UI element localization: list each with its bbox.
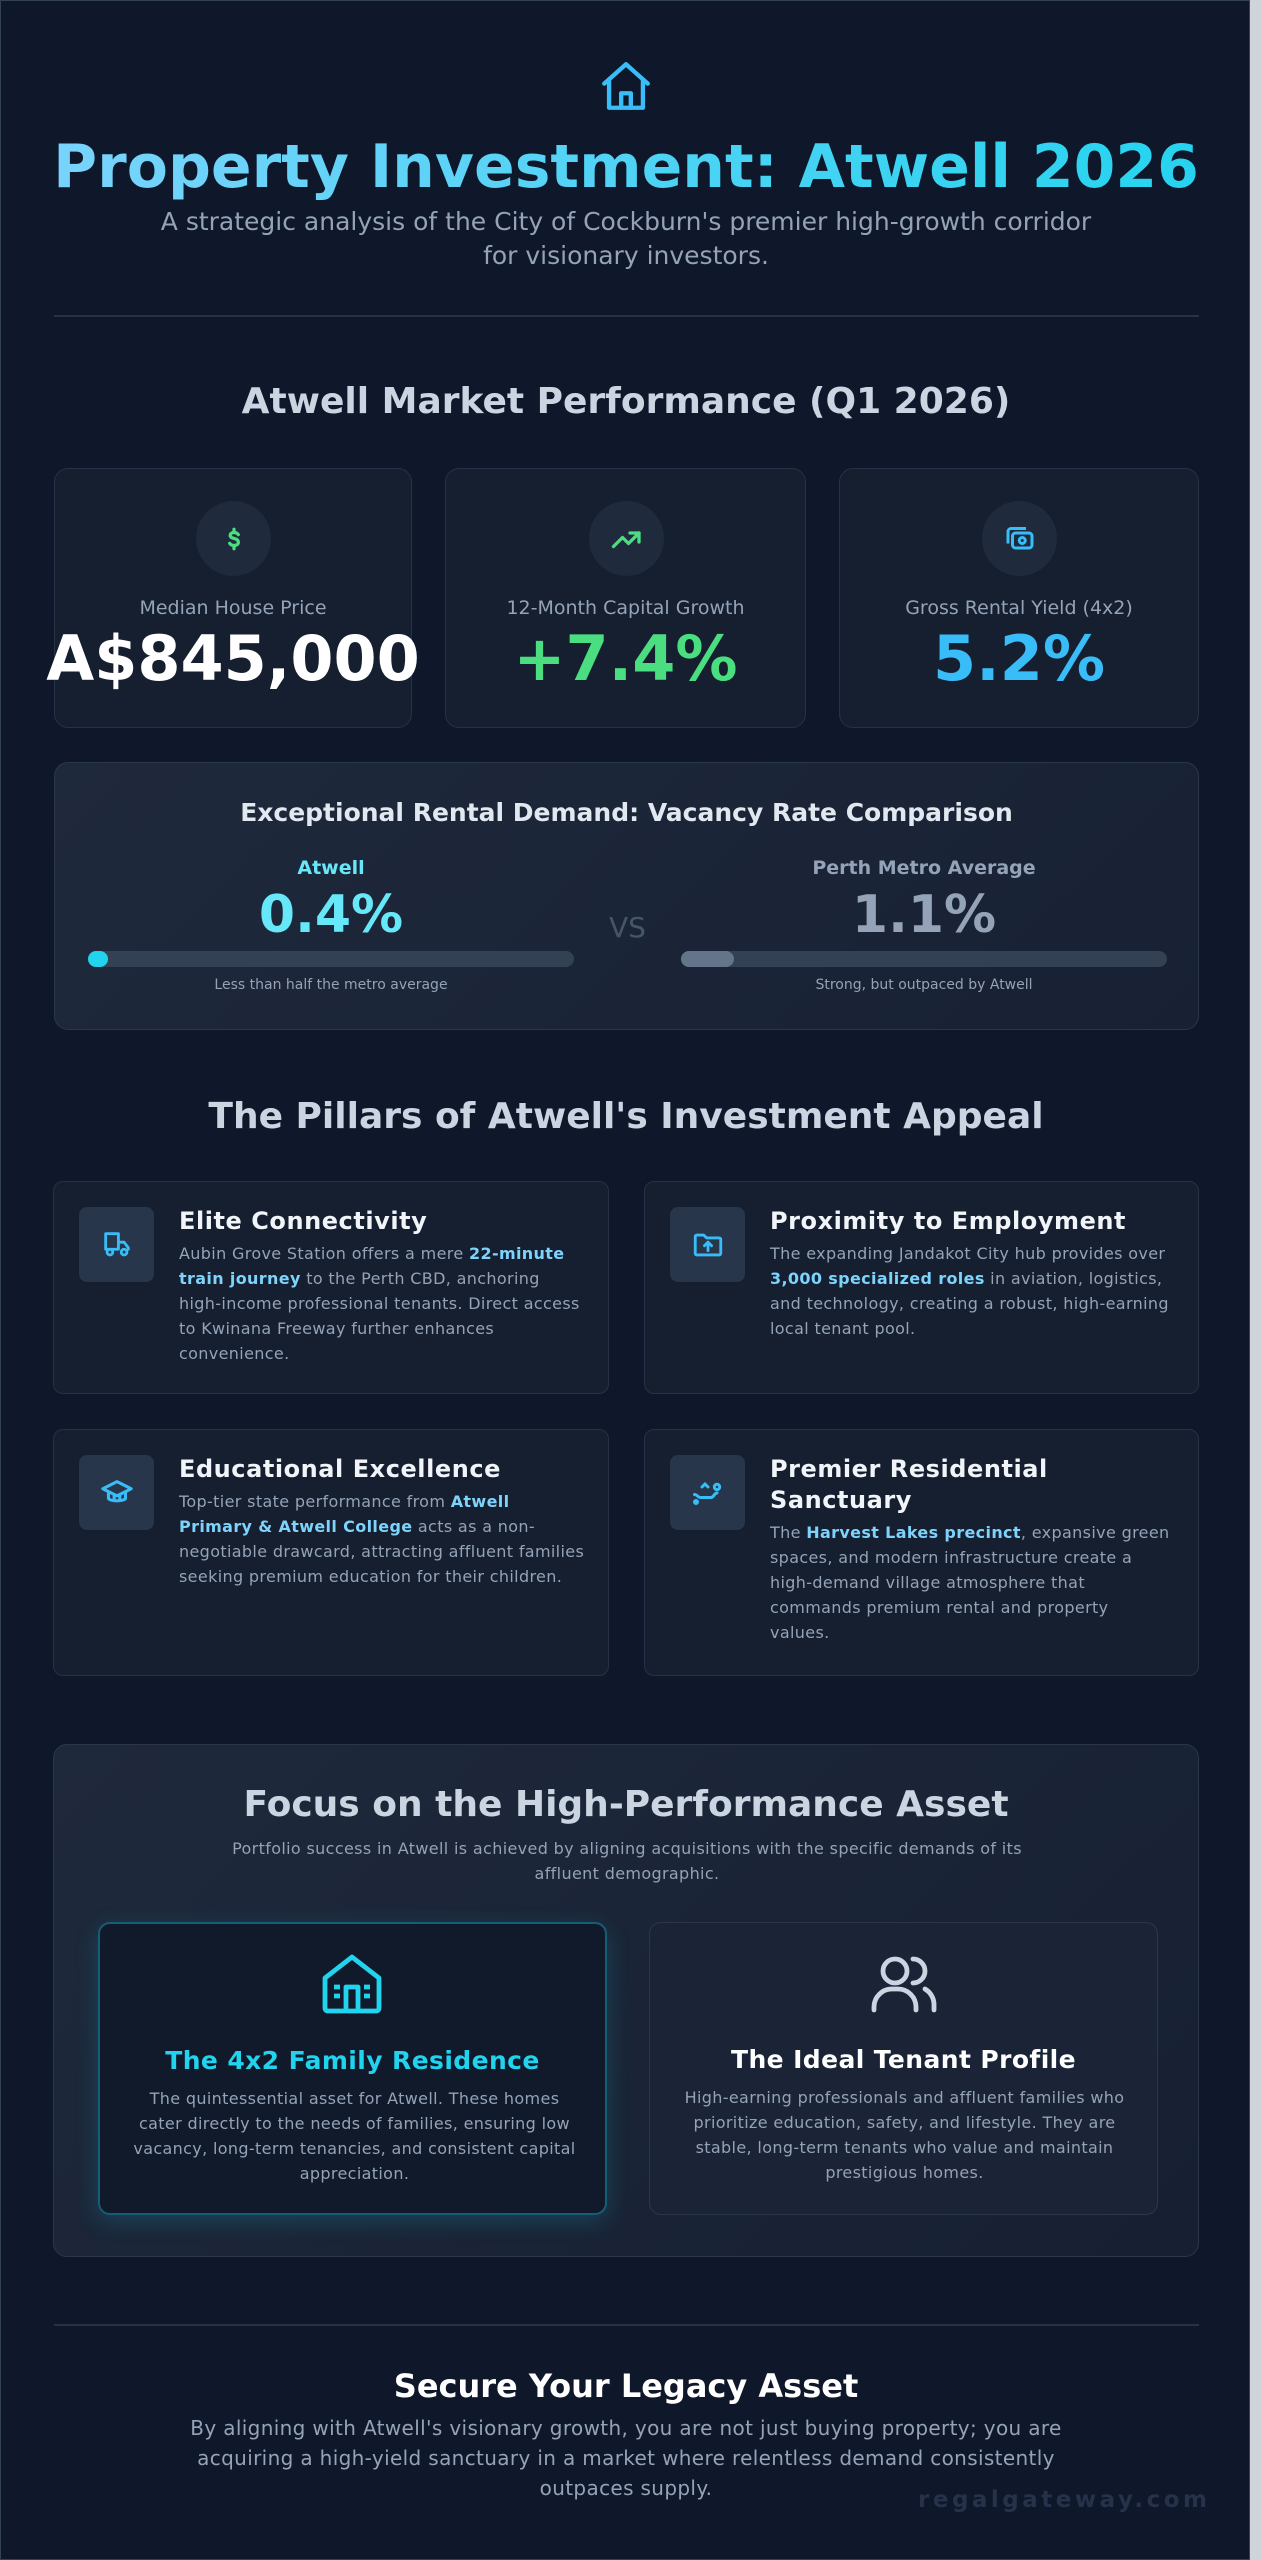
pillar: employment: The expanding Jandakot City hub provides over 3,000 specialized roles in aviation, logistics, and technology, creating a robust, high-earning local tenant pool.: [770, 1244, 1169, 1338]
vs: VS: [609, 911, 646, 944]
atwell block: [88, 857, 574, 993]
icon: house: [602, 62, 650, 110]
metro block: Perth Metro Average: [812, 857, 1036, 879]
pillar: residential: Premier Residential Sanctuary: [770, 1455, 1048, 1514]
stat card: median price: Median House Price: [139, 597, 327, 619]
heading: pillars: The Pillars of Atwell's Investment Appeal: [208, 1096, 1044, 1137]
heading: market performance: Atwell Market Performance (Q1 2026): [242, 381, 1010, 422]
icon: graduation cap: [79, 1455, 154, 1530]
pillar: residential: The Harvest Lakes precinct, expansive green spaces, and modern infrastructure create a high-demand village atmosphere that commands premium rental and property values.: [770, 1523, 1170, 1642]
panel: vacancy comparison: [54, 762, 1199, 1030]
card: tenant profile: High-earning professionals and affluent families who prioritize education, safety, and lifestyle. They are stable, long-term tenants who value and maintain prestigious homes.: [685, 2088, 1124, 2182]
heading: secure legacy: Secure Your Legacy Asset: [394, 2367, 858, 2405]
stat card: capital growth: 12-Month Capital Growth: [506, 597, 745, 619]
subtitle: for visionary investors.: [483, 241, 769, 270]
pillar: residential: [644, 1429, 1199, 1676]
atwell block: Less than half the metro average: [214, 977, 448, 993]
pillar: education: Educational Excellence: [179, 1455, 501, 1483]
stat card: rental yield: [839, 468, 1199, 728]
card: family residence: The quintessential asset for Atwell. These homes cater directly to the needs of families, ensuring low vacancy, long-term tenancies, and consistent capital appreciation.: [133, 2089, 576, 2183]
pillar: connectivity: Aubin Grove Station offers a mere 22-minute train journey to the Perth CBD, anchoring high-income professional tenants. Direct access to Kwinana Freeway further enhances convenience.: [179, 1244, 580, 1363]
card: family residence: [98, 1922, 607, 2215]
bar: [681, 951, 1167, 967]
value: A$845,000: [46, 622, 420, 695]
pillar: employment: [644, 1181, 1199, 1394]
title: The 4x2 Family Residence: [165, 2046, 540, 2075]
stat card: rental yield: Gross Rental Yield (4x2): [905, 597, 1133, 619]
value: 5.2%: [933, 622, 1105, 695]
metro block: [681, 857, 1167, 993]
stat card: capital growth: [445, 468, 806, 728]
pillar: education: Top-tier state performance from Atwell Primary & Atwell College acts as a non-negotiable drawcard, attracting affluent families seeking premium education for their children.: [179, 1492, 584, 1586]
subtitle: A strategic analysis of the City of Cockburn's premier high-growth corridor: [161, 207, 1091, 236]
icon: train: [79, 1207, 154, 1282]
icon: folder: [670, 1207, 745, 1282]
atwell block: Atwell: [297, 857, 365, 879]
title: Property Investment: Atwell 2026: [53, 132, 1199, 202]
icon: dollar: [196, 501, 271, 576]
watermark: regalgateway.com: [918, 2487, 1210, 2513]
heading: Focus on the High-Performance Asset: [243, 1784, 1009, 1825]
pillar: education: [53, 1429, 609, 1676]
heading: Exceptional Rental Demand: Vacancy Rate Comparison: [240, 798, 1013, 827]
subtitle: [161, 207, 1092, 270]
icon: users: [872, 1956, 936, 2012]
pillar: connectivity: Elite Connectivity: [179, 1207, 427, 1235]
value: +7.4%: [514, 622, 737, 695]
pillar: employment: Proximity to Employment: [770, 1207, 1126, 1235]
icon: home: [322, 1954, 382, 2014]
icon: landscape: [670, 1455, 745, 1530]
metro block: 1.1%: [852, 885, 996, 945]
pillar: connectivity: [53, 1181, 609, 1394]
icon: cash: [982, 501, 1057, 576]
metro block: Strong, but outpaced by Atwell: [815, 977, 1033, 993]
closing text: By aligning with Atwell's visionary growth, you are not just buying property; you are acquiring a high-yield sanctuary in a market where relentless demand consistently outpaces supply.: [190, 2416, 1062, 2500]
subtitle: Portfolio success in Atwell is achieved by aligning acquisitions with the specific demands of its affluent demographic.: [232, 1839, 1022, 1883]
icon: trend: [589, 501, 664, 576]
bar: [88, 951, 574, 967]
panel: focus asset: [53, 1744, 1199, 2257]
atwell block: 0.4%: [259, 885, 403, 945]
card: tenant profile: [649, 1922, 1158, 2215]
stat card: median price: [54, 468, 412, 728]
title: The Ideal Tenant Profile: [731, 2045, 1076, 2074]
